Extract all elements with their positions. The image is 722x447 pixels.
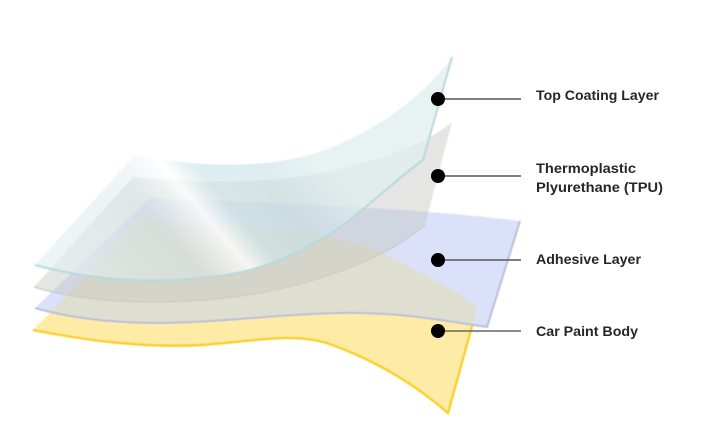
leader: car paint bbox=[431, 324, 521, 338]
label: thermoplastic polyurethane: Thermoplastic bbox=[536, 161, 637, 176]
film layers bbox=[33, 57, 520, 413]
label: thermoplastic polyurethane: Plyurethane (TPU) bbox=[536, 180, 663, 195]
layer: top coating bbox=[35, 57, 452, 280]
layer: car paint body bbox=[33, 220, 477, 413]
layered film diagram bbox=[32, 56, 662, 416]
layer: thermoplastic polyurethane bbox=[34, 122, 452, 302]
leader: top coating bbox=[431, 92, 521, 106]
label: car paint body: Car Paint Body bbox=[536, 324, 639, 339]
layer: adhesive bbox=[34, 198, 522, 328]
label: thermoplastic polyurethane bbox=[536, 161, 663, 195]
leader: adhesive bbox=[431, 253, 521, 267]
label: adhesive layer: Adhesive Layer bbox=[536, 252, 642, 267]
leader: TPU bbox=[431, 169, 521, 183]
label: top coating layer: Top Coating Layer bbox=[536, 88, 660, 103]
